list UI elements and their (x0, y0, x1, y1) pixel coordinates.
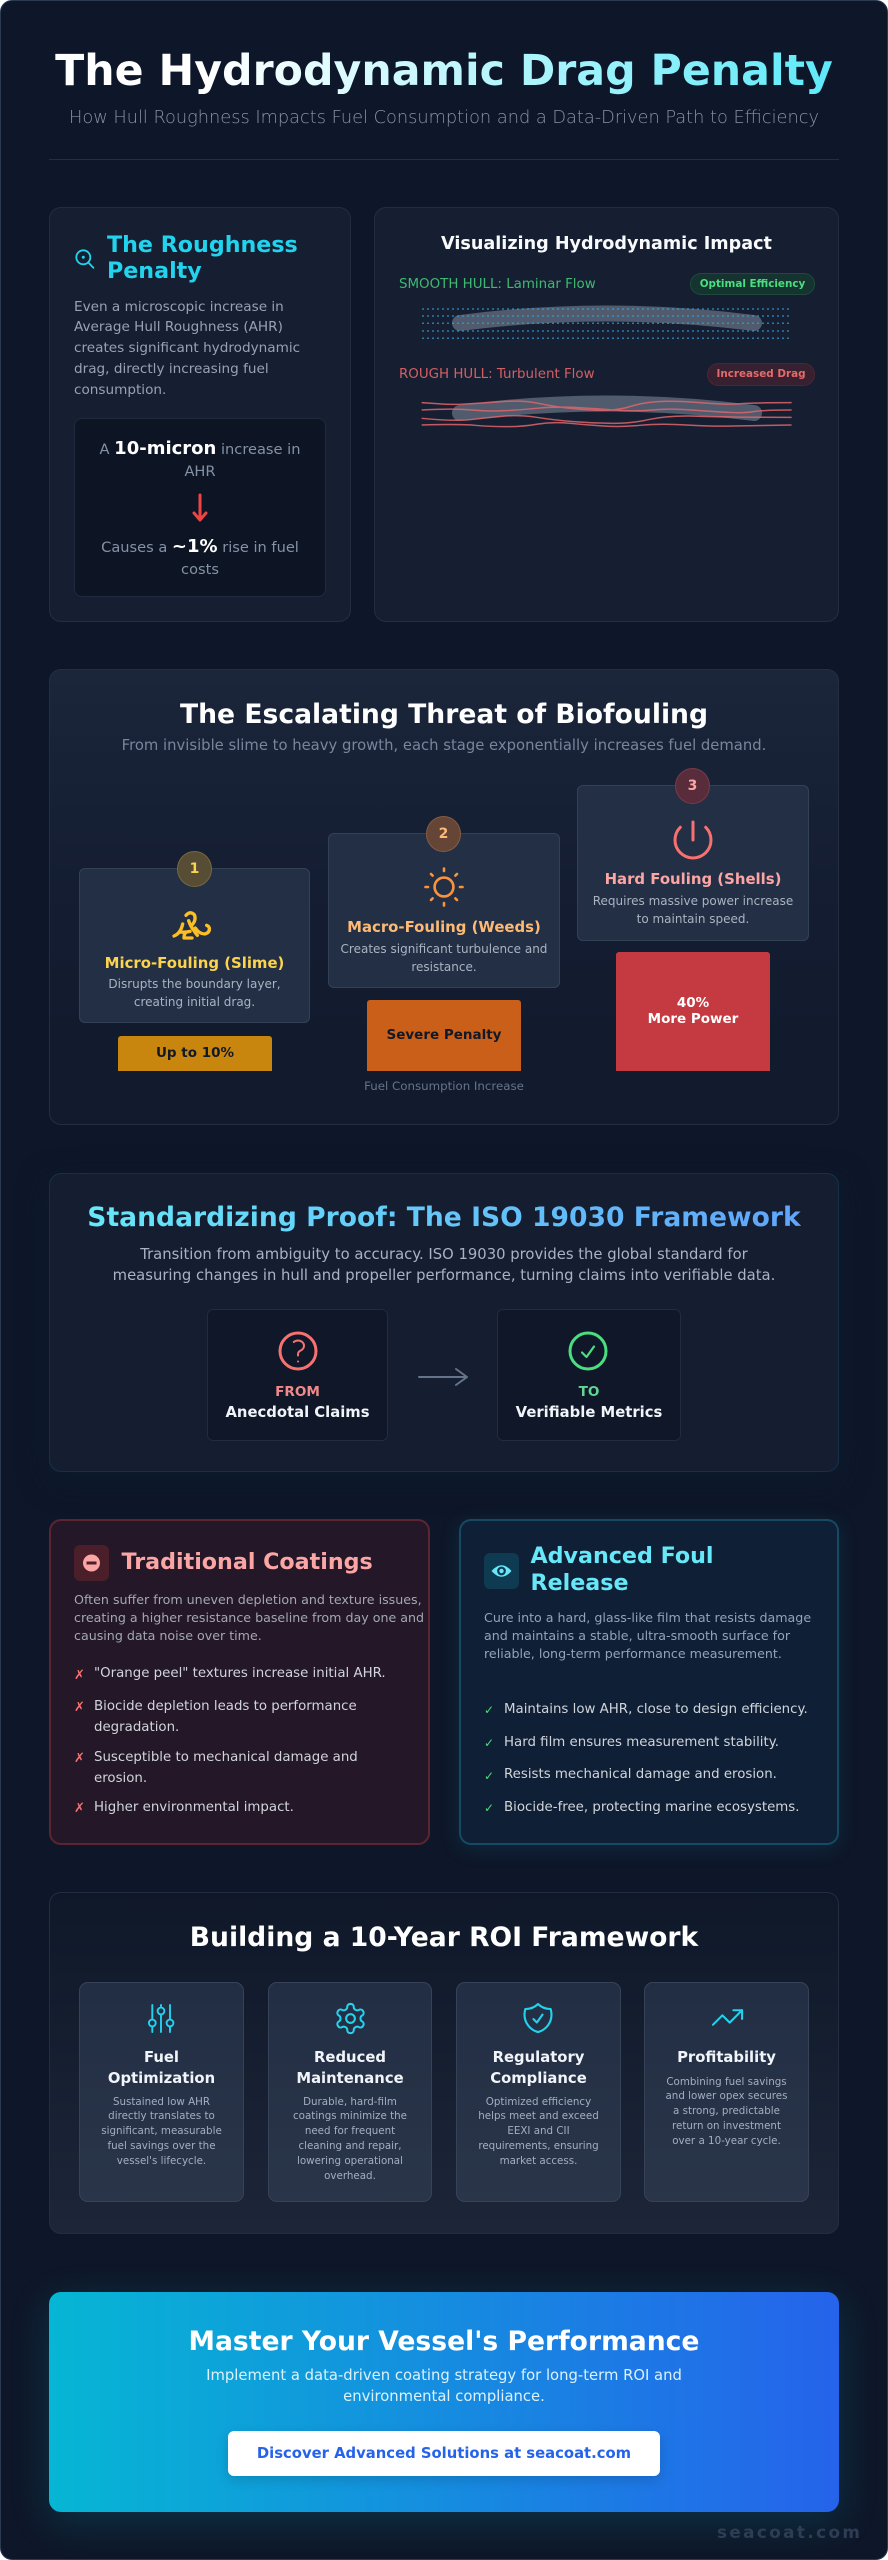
text block: and maintains a stable, ultra-smooth surface for (484, 1628, 790, 1643)
list: Resists mechanical damage and erosion. (504, 1767, 777, 1782)
metric text: Verifiable Metrics (516, 1404, 662, 1421)
card text: return on investment (672, 2120, 781, 2132)
arrow: down (192, 494, 208, 522)
subtitle: How Hull Roughness Impacts Fuel Consumption and a Data-Driven Path to Efficiency (69, 108, 819, 128)
card title: Maintenance (296, 2070, 404, 2087)
card text: Disrupts the boundary layer, (108, 977, 281, 991)
card text: requirements, ensuring (478, 2140, 599, 2152)
bar: 40% more power: More Power (648, 1011, 738, 1027)
bar: severe penalty: Severe Penalty (386, 1027, 502, 1043)
label: FROM (275, 1384, 320, 1400)
body text: drag, directly increasing fuel (74, 361, 269, 377)
caption: Fuel Consumption Increase (364, 1079, 524, 1093)
list: ✓ (484, 1703, 494, 1717)
card text: over a 10-year cycle. (672, 2135, 781, 2147)
icon: eye (484, 1553, 519, 1589)
badge: increased drag (707, 363, 815, 386)
text block: causing data noise over time. (74, 1628, 262, 1643)
badge: increased drag: Increased Drag (716, 368, 806, 380)
heading: Release (530, 1570, 629, 1596)
card text: creating initial drag. (134, 995, 255, 1009)
card text: helps meet and exceed (478, 2110, 599, 2122)
panel: call to action (49, 2292, 839, 2512)
list: Maintains low AHR, close to design efficiency. (504, 1702, 808, 1716)
card text (108, 977, 281, 1009)
text block: Transition from ambiguity to accuracy. ISO 19030 provides the global standard for (140, 1246, 748, 1263)
card title: Fuel (144, 2049, 179, 2066)
card text: lowering operational (297, 2155, 403, 2167)
text block: Implement a data-driven coating strategy for long-term ROI and (206, 2367, 682, 2384)
card text: Durable, hard-film (303, 2096, 397, 2108)
callout: 10-micron: costs (181, 561, 219, 578)
heading: Visualizing Hydrodynamic Impact (441, 234, 772, 254)
card text (293, 2096, 407, 2182)
list: degradation. (94, 1720, 179, 1735)
card text: and lower opex secures (665, 2090, 788, 2102)
text block: Often suffer from uneven depletion and texture issues, (74, 1592, 422, 1607)
panel: advanced foul release (459, 1519, 839, 1845)
card title: Regulatory (493, 2049, 584, 2066)
icon: trending up (712, 2009, 744, 2026)
heading: Traditional Coatings (122, 1548, 373, 1574)
badge: optimal efficiency (690, 273, 815, 295)
button (228, 2431, 660, 2476)
bar: 40% more power (616, 952, 770, 1071)
card: regulatory compliance (456, 1982, 621, 2202)
icon: check (568, 1332, 608, 1370)
text block (206, 2367, 682, 2405)
body text (74, 299, 300, 398)
icon: slime (172, 911, 212, 940)
arrow (418, 1368, 468, 1386)
badge: 3: 3 (688, 778, 697, 794)
callout: 10-micron (74, 418, 326, 597)
text block: creating a higher resistance baseline from day one and (74, 1610, 424, 1625)
text block: environmental compliance. (343, 2388, 545, 2405)
card text: Requires massive power increase (593, 894, 793, 908)
label: TO (579, 1384, 599, 1400)
list: Hard film ensures measurement stability. (504, 1734, 779, 1750)
card text: need for frequent (305, 2125, 395, 2137)
icon: shield (523, 2003, 553, 2034)
card title: Hard Fouling (Shells) (605, 870, 781, 888)
button: Discover Advanced Solutions at seacoat.com (257, 2445, 631, 2462)
icon: gear (336, 2002, 365, 2034)
card text (665, 2076, 788, 2147)
icon: question (278, 1332, 318, 1370)
list: Higher environmental impact. (94, 1800, 294, 1815)
panel: traditional coatings (49, 1519, 430, 1845)
diagram: laminar flow (422, 306, 789, 339)
claim text: Anecdotal Claims (225, 1404, 370, 1421)
heading (107, 232, 298, 284)
card: macro-fouling (328, 833, 560, 988)
card text (593, 894, 793, 926)
card title: Profitability (677, 2049, 776, 2066)
bar: up to 10%: Up to 10% (156, 1045, 234, 1061)
list: ✗ (74, 1700, 85, 1715)
card title: Optimization (108, 2070, 215, 2087)
bar: 40% more power: 40% (677, 995, 709, 1011)
card: fuel optimization (79, 1982, 244, 2202)
heading: Advanced Foul (530, 1543, 714, 1569)
card title (108, 2049, 215, 2087)
card text: EEXI and CII (507, 2125, 570, 2137)
heading: Master Your Vessel's Performance (189, 2326, 699, 2357)
card title: Micro-Fouling (Slime) (105, 954, 284, 972)
card text: vessel's lifecycle. (117, 2155, 206, 2167)
icon: power (674, 820, 712, 860)
list: "Orange peel" textures increase initial AHR. (94, 1666, 386, 1681)
heading: The Escalating Threat of Biofouling (180, 699, 708, 730)
list (74, 1666, 386, 1816)
card text (478, 2096, 599, 2167)
heading: Building a 10-Year ROI Framework (190, 1922, 698, 1953)
panel: visualizing hydrodynamic impact (374, 207, 839, 622)
card text (101, 2096, 222, 2167)
card text (341, 942, 547, 974)
icon: sliders (148, 2004, 174, 2033)
title: The Hydrodynamic Drag Penalty (55, 46, 833, 96)
panel: the roughness penalty (49, 207, 351, 622)
body text: Even a microscopic increase in (74, 299, 284, 315)
label: smooth hull: SMOOTH HULL: Laminar Flow (399, 277, 596, 292)
box: from (207, 1309, 388, 1441)
list: ✗ (74, 1751, 85, 1766)
list: Biocide-free, protecting marine ecosystems. (504, 1800, 800, 1814)
list (484, 1702, 808, 1815)
box: to (497, 1309, 681, 1441)
bar: severe penalty (367, 1000, 521, 1071)
heading (530, 1543, 714, 1596)
list: ✓ (484, 1736, 494, 1750)
icon: minus (74, 1545, 109, 1581)
card title: Reduced (314, 2049, 386, 2066)
bar: up to 10% (118, 1036, 272, 1071)
card text: fuel savings over the (107, 2140, 216, 2152)
card: reduced maintenance (268, 1982, 432, 2202)
badge: 3 (675, 768, 710, 804)
card: micro-fouling (79, 868, 310, 1023)
list: ✗ (74, 1801, 85, 1816)
list: ✓ (484, 1769, 494, 1783)
card: hard fouling (577, 785, 809, 941)
card text: significant, measurable (101, 2125, 222, 2137)
badge: optimal efficiency: Optimal Efficiency (700, 278, 805, 290)
body text: creates significant hydrodynamic (74, 340, 300, 356)
card text: overhead. (324, 2170, 376, 2182)
card text: Optimized efficiency (486, 2096, 591, 2108)
watermark: seacoat.com (717, 2522, 862, 2542)
card title: Compliance (490, 2070, 587, 2087)
text block: measuring changes in hull and propeller performance, turning claims into verifiable data. (113, 1267, 775, 1284)
callout: 10-micron: Causes a ~1% rise in fuel (101, 536, 299, 557)
callout: 10-micron: A 10-micron increase in (100, 438, 300, 459)
heading: Penalty (107, 258, 202, 284)
card title (490, 2049, 587, 2087)
list: ✗ (74, 1668, 85, 1683)
card text: cleaning and repair, (298, 2140, 402, 2152)
diagram: turbulent flow (422, 396, 792, 428)
text block: reliable, long-term performance measurement. (484, 1646, 782, 1661)
card text: resistance. (411, 960, 477, 974)
text block: Cure into a hard, glass-like film that resists damage (484, 1610, 811, 1625)
badge: 1: 1 (190, 861, 199, 877)
icon: magnifier (75, 249, 94, 269)
panel: 10-year ROI framework (49, 1892, 839, 2234)
heading: Standardizing Proof: The ISO 19030 Framework (87, 1202, 801, 1233)
list: ✓ (484, 1801, 494, 1815)
callout: 10-micron: AHR (184, 463, 216, 480)
text block (74, 1592, 424, 1643)
badge: 2: 2 (439, 826, 448, 842)
card text: directly translates to (108, 2110, 215, 2122)
card text: a strong, predictable (673, 2105, 780, 2117)
badge: 2 (426, 816, 461, 852)
icon: sun (424, 867, 464, 907)
badge: 1 (177, 851, 212, 887)
card text: market access. (500, 2155, 577, 2167)
card: profitability (644, 1982, 809, 2202)
card text: coatings minimize the (293, 2110, 407, 2122)
card text: Combining fuel savings (666, 2076, 787, 2088)
body text: Average Hull Roughness (AHR) (74, 319, 283, 335)
card title: Macro-Fouling (Weeds) (347, 918, 541, 936)
list: erosion. (94, 1771, 147, 1786)
card text: Sustained low AHR (113, 2096, 210, 2108)
heading: The Roughness (107, 232, 298, 258)
label: rough hull: ROUGH HULL: Turbulent Flow (399, 367, 595, 382)
subheading: From invisible slime to heavy growth, each stage exponentially increases fuel demand. (122, 737, 766, 754)
card title (296, 2049, 404, 2087)
body text: consumption. (74, 382, 166, 398)
list: Biocide depletion leads to performance (94, 1699, 357, 1714)
text block (484, 1610, 811, 1661)
card text: to maintain speed. (637, 912, 749, 926)
text block (113, 1246, 775, 1284)
panel: escalating threat of biofouling (49, 669, 839, 1125)
card text: Creates significant turbulence and (341, 942, 547, 956)
list: Susceptible to mechanical damage and (94, 1750, 358, 1765)
panel: ISO 19030 framework (49, 1173, 839, 1472)
